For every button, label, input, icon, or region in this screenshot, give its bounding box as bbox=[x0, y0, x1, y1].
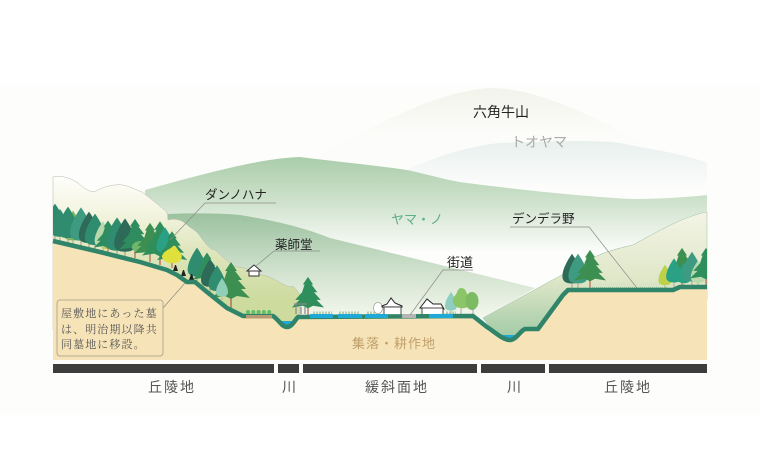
callout: graves note: 屋敷地にあった墓 bbox=[61, 306, 158, 320]
leader lines bbox=[163, 203, 637, 315]
water: river right bbox=[502, 335, 518, 339]
background band bbox=[0, 85, 760, 415]
mountain: Rokkoushi bbox=[320, 88, 650, 190]
right hill trees bbox=[562, 248, 707, 288]
callout: graves note: は、明治期以降共 bbox=[61, 322, 158, 336]
landscape cross-section infographic bbox=[52, 88, 708, 394]
zone labels: 川 bbox=[507, 379, 521, 395]
ground bbox=[53, 241, 707, 360]
callout: graves note: 同墓地に移設。 bbox=[61, 337, 146, 351]
mountain: Toyama bbox=[407, 141, 707, 210]
trees: left forest bbox=[45, 204, 187, 268]
water: river left bbox=[280, 321, 294, 325]
icon: Yakushido hall bbox=[247, 265, 261, 276]
ground outline bbox=[53, 241, 707, 340]
road bbox=[402, 314, 416, 318]
field bbox=[246, 312, 272, 318]
zone labels: 緩斜面地 bbox=[365, 379, 429, 395]
label: settlement and farmland: 集落・耕作地 bbox=[352, 336, 436, 351]
tree by river bbox=[292, 277, 324, 316]
icon: graves bbox=[173, 265, 194, 280]
mid ridge bbox=[168, 213, 535, 320]
zone labels: 丘陵地 bbox=[604, 379, 652, 395]
zone labels bbox=[148, 379, 652, 395]
callout: graves note bbox=[57, 300, 163, 356]
icon: yellow tree bbox=[162, 246, 182, 263]
label: Toyama: トオヤマ bbox=[511, 134, 567, 150]
torii fence bbox=[294, 304, 307, 314]
label: Yama-no: ヤマ・ノ bbox=[391, 212, 443, 227]
left hill bbox=[53, 176, 300, 330]
irrigation water bbox=[310, 314, 453, 318]
zone labels: 川 bbox=[282, 379, 296, 395]
label: Denderano: デンデラ野 bbox=[512, 211, 575, 226]
zone labels: 丘陵地 bbox=[148, 379, 196, 395]
trees: slope forest bbox=[188, 248, 250, 308]
label: Yakushido: 薬師堂 bbox=[275, 238, 313, 252]
zone bars bbox=[53, 364, 707, 373]
label: Rokkoushi: 六角牛山 bbox=[473, 104, 529, 120]
village: houses and trees bbox=[313, 288, 478, 315]
label: Kaido: 街道 bbox=[447, 255, 473, 270]
mountain: Yama-no ridge bbox=[145, 157, 707, 300]
label: Dannohana: ダンノハナ bbox=[205, 187, 267, 202]
right hill bbox=[483, 212, 707, 340]
